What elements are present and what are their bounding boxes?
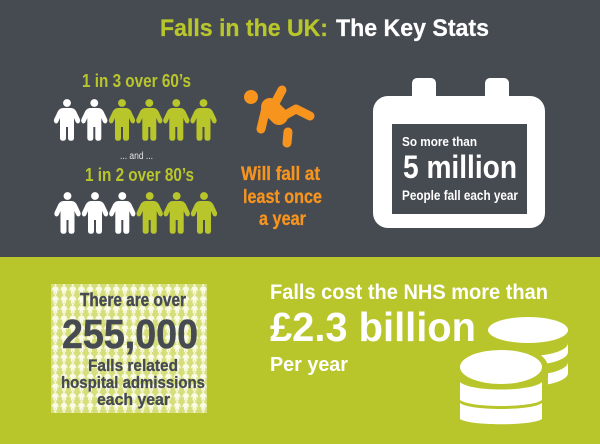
title — [160, 15, 489, 42]
heading: 1 in 2 over 80's: 1 in 2 over 80’s — [85, 165, 194, 185]
panel: dark top background — [0, 0, 600, 257]
icon: coin stacks — [454, 317, 568, 427]
text: 255,000: 255,000 — [62, 311, 198, 357]
text: will fall at least once a year: least once — [243, 187, 322, 208]
text: £2.3 billion: £2.3 billion — [270, 304, 476, 350]
icon row: 2 of 6 people — [54, 99, 217, 141]
text: so more than: So more than — [402, 134, 477, 149]
heading: 1 in 3 over 60's: 1 in 3 over 60’s — [82, 71, 191, 91]
title: The Key Stats — [336, 15, 489, 42]
text: falls related hospital admissions each year: Falls related — [88, 356, 178, 375]
icon: falling person — [244, 90, 310, 143]
text: falls related hospital admissions each year: hospital admissions — [61, 373, 205, 392]
title: Falls in the UK: — [160, 15, 328, 42]
text: falls related hospital admissions each year — [61, 356, 205, 409]
panel: lime bottom background — [0, 257, 600, 444]
text: will fall at least once a year: a year — [259, 209, 307, 230]
text: people fall each year: People fall each year — [402, 188, 519, 203]
icon: calendar with stat — [373, 78, 545, 228]
panel: hospital admissions — [51, 284, 207, 413]
text: will fall at least once a year — [241, 164, 322, 230]
text: falls cost the NHS: Falls cost the NHS more than — [270, 281, 548, 304]
text: will fall at least once a year: Will fall at — [241, 164, 321, 185]
icon row: 3 of 6 people — [54, 192, 217, 234]
text: there are over: There are over — [80, 290, 186, 310]
text: 5 million: 5 million — [403, 149, 517, 185]
text: falls related hospital admissions each year: each year — [97, 390, 170, 409]
text: per year: Per year — [270, 354, 348, 376]
connector text: and: ... and ... — [120, 151, 153, 162]
